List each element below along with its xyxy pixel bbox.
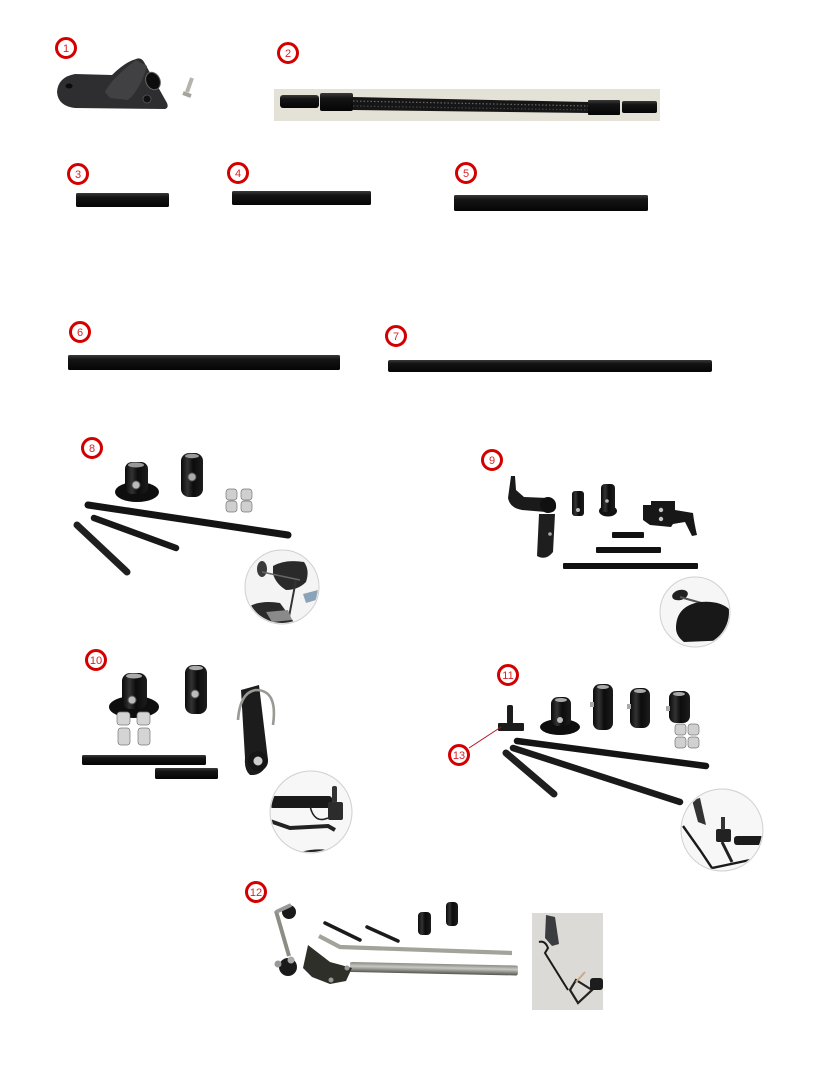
icon: hinge bracket (303, 945, 352, 984)
inset photo (681, 789, 764, 871)
rods (563, 532, 698, 569)
badge 4: 4 (235, 168, 241, 180)
icon: clamps (418, 902, 458, 935)
rod (68, 355, 340, 370)
icon: clamp with base (115, 462, 159, 502)
icon: tall clamp (590, 684, 613, 730)
badge 8: 8 (89, 443, 95, 455)
leader line to badge 13 (469, 727, 501, 748)
icon: gooseneck rod (280, 93, 657, 115)
icon: tube clamp with U-bolt (238, 685, 274, 775)
icon: upper joint and link (276, 905, 296, 956)
badge 7 (386, 326, 406, 346)
icon: short clamp (666, 691, 690, 723)
rod (388, 360, 712, 372)
item 2: gooseneck (274, 44, 660, 121)
item 5: long rod (454, 164, 648, 211)
badge 12 (246, 882, 266, 902)
rod (454, 195, 648, 211)
badge 5: 5 (463, 168, 469, 180)
item 6: longer rod (68, 322, 340, 370)
item 3: short rod (68, 164, 169, 207)
badge 13: 13 (453, 750, 465, 762)
icon: T piece (498, 705, 524, 731)
item 1: angled mount (56, 38, 192, 109)
small rods (325, 923, 398, 941)
icon: nuts (226, 489, 252, 512)
badge 10 (86, 650, 106, 670)
badge 13 (450, 746, 468, 764)
icon: nuts (117, 712, 150, 745)
rod (232, 191, 371, 205)
badge 2 (278, 44, 298, 62)
thick steel rod (350, 962, 518, 976)
badge 2: 2 (285, 48, 291, 60)
item 8: mounting kit (77, 438, 319, 625)
icon: swing arm (508, 476, 556, 558)
icon: medium clamp (627, 688, 650, 728)
badge 4 (228, 164, 248, 182)
badge 1: 1 (63, 43, 69, 55)
badge 8 (82, 438, 102, 458)
item 11: multi-clamp kit (450, 666, 764, 871)
rod (76, 193, 169, 207)
badge 11: 11 (502, 670, 514, 682)
item 12: stainless steel kit (246, 882, 603, 1010)
badge 12: 12 (250, 887, 262, 899)
icon: clamp (572, 491, 584, 516)
badge 10: 10 (90, 655, 102, 667)
inset photo (270, 771, 352, 860)
icon: mounting plate (57, 58, 168, 109)
inset photo (532, 913, 603, 1010)
item 9: swing-away kit (482, 450, 732, 647)
icon: quick release plate (643, 501, 697, 536)
icon: clamp (181, 453, 203, 497)
icon: clamp (185, 665, 207, 714)
badge 9 (482, 450, 502, 470)
badge 9: 9 (489, 455, 495, 467)
inset photo (660, 577, 732, 647)
rods (82, 755, 218, 779)
photo background (274, 89, 660, 121)
icon: clamp with base (540, 697, 580, 735)
badge 3: 3 (75, 169, 81, 181)
badge 6: 6 (77, 327, 83, 339)
icon: clamp with base (109, 673, 159, 718)
badge 11 (498, 666, 518, 684)
item 4: medium rod (228, 164, 371, 205)
rods (506, 741, 706, 802)
item 10: handlebar kit (82, 650, 352, 860)
rods (77, 505, 288, 572)
icon: nuts (675, 724, 699, 748)
badge 5 (456, 164, 476, 182)
item 7: longest rod (386, 326, 712, 372)
badge 7: 7 (393, 331, 399, 343)
icon: screw (183, 78, 192, 96)
icon: clamp with base (599, 484, 617, 516)
badge 6 (70, 322, 90, 342)
thin bent steel rod (319, 936, 512, 953)
icon: lower joint (274, 956, 297, 976)
inset photo (245, 550, 319, 625)
